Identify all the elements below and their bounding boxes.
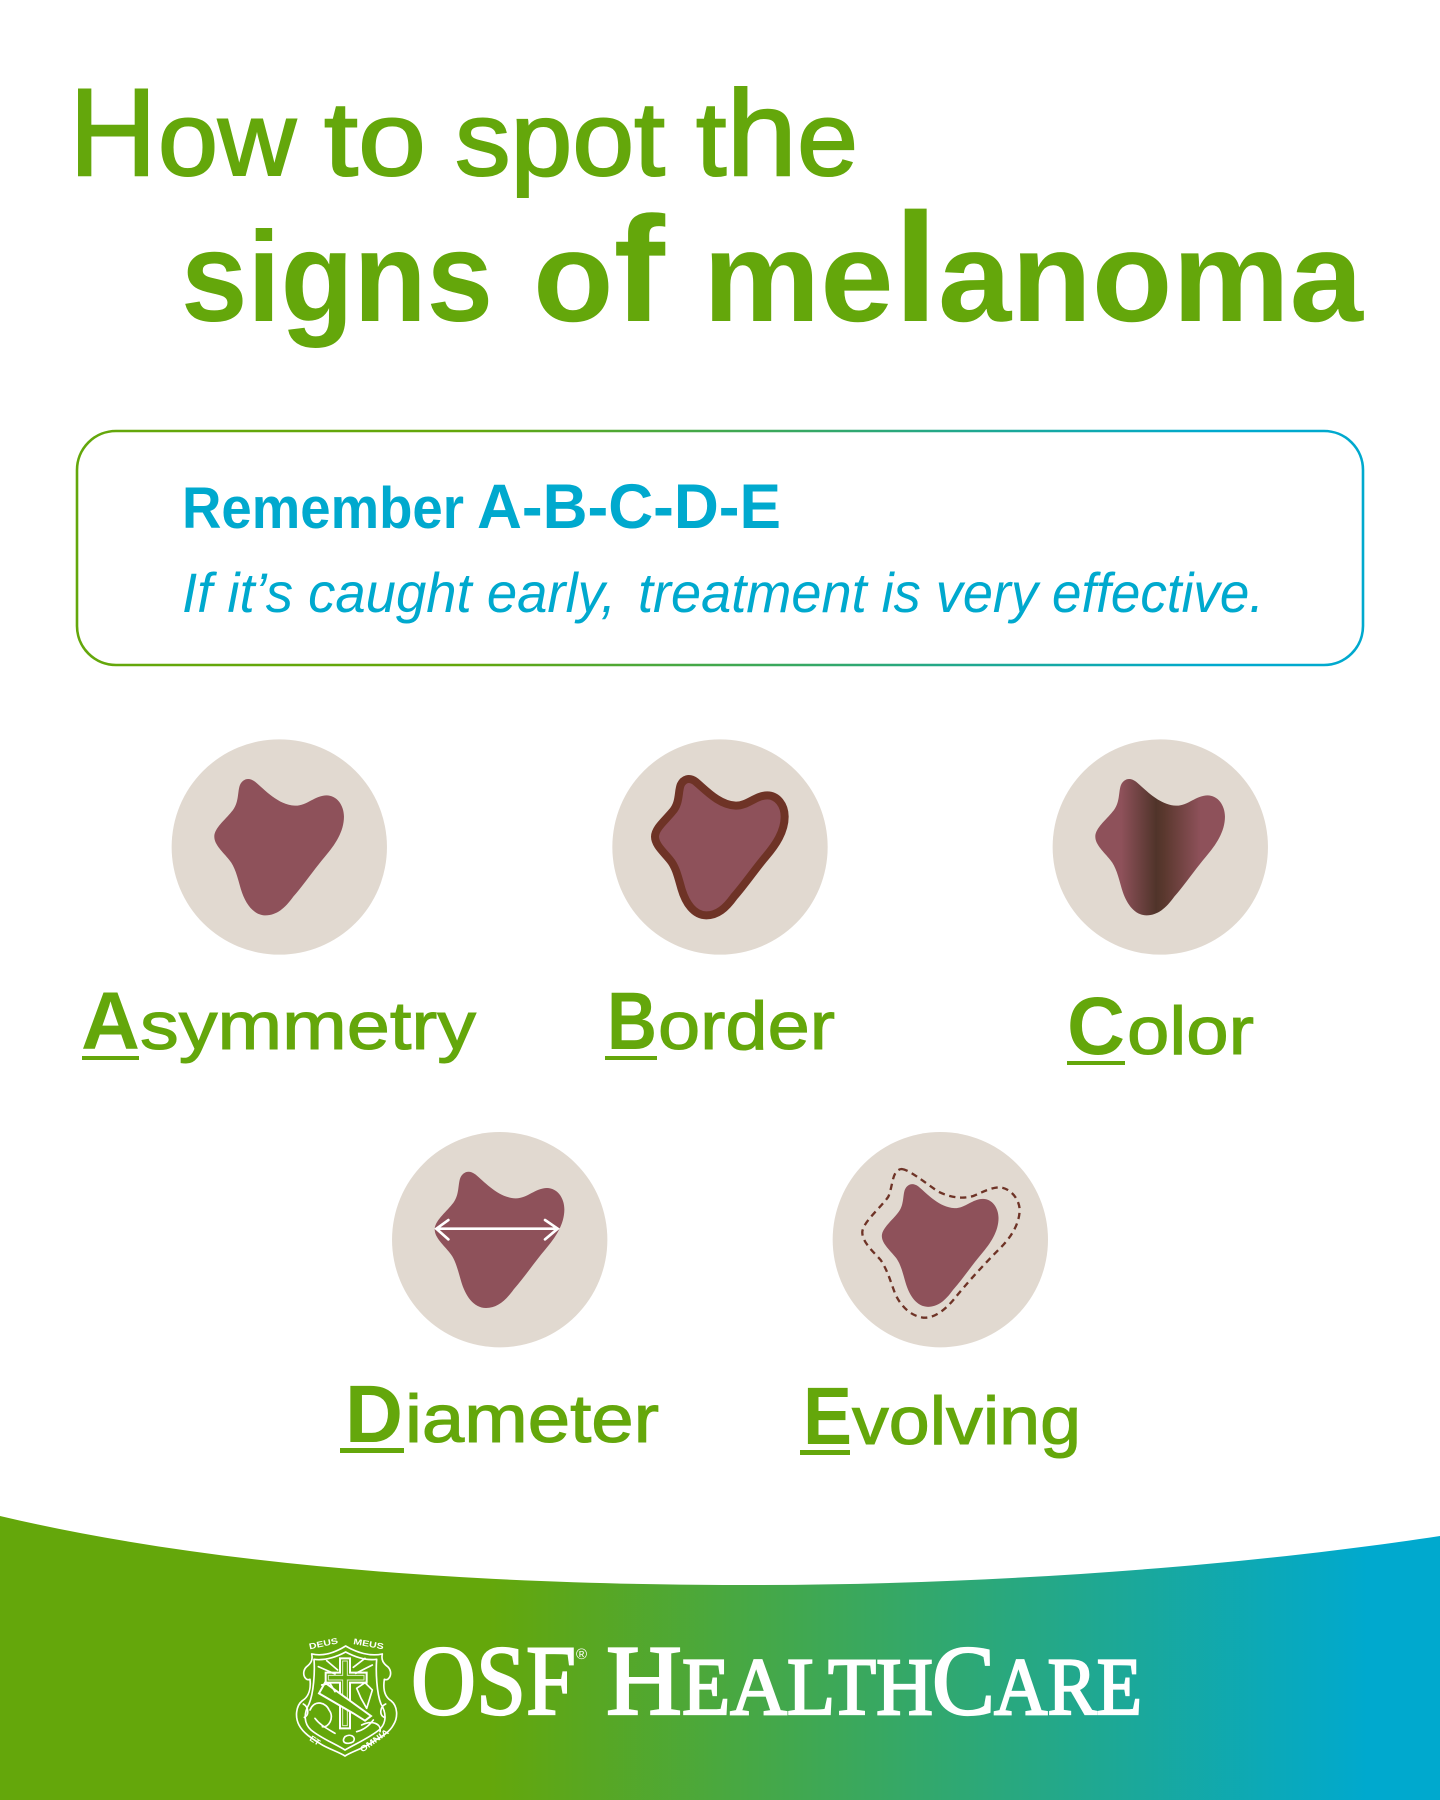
label: border <box>605 976 835 1067</box>
title line 1: the <box>696 65 858 201</box>
item: asymmetry <box>81 739 476 1067</box>
title line 1: H <box>69 64 157 202</box>
hands and rays <box>303 1658 386 1743</box>
label: asymmetry <box>81 976 476 1067</box>
label: border: B <box>607 976 657 1067</box>
icon: diameter <box>392 1132 607 1347</box>
crest motto: OMNIA <box>358 1727 390 1754</box>
title line 1: to <box>324 81 426 198</box>
wordmark: ® <box>576 1646 587 1663</box>
item: evolving <box>800 1132 1081 1462</box>
wordmark: C <box>932 1625 995 1736</box>
title line 2: of <box>533 185 666 353</box>
label: diameter: D <box>345 1369 403 1460</box>
label: asymmetry: symmetry <box>140 988 476 1064</box>
crest motto: DEUS <box>308 1635 339 1651</box>
icon: asymmetry <box>172 739 387 955</box>
panel outline <box>77 431 1363 665</box>
panel text: effective. <box>1052 561 1264 624</box>
panel heading: Remember <box>182 476 464 541</box>
wordmark: EALTH <box>682 1641 933 1732</box>
item: border <box>605 739 835 1067</box>
panel heading <box>182 472 781 542</box>
crest motto: ET <box>308 1733 322 1747</box>
label: color <box>1067 981 1254 1072</box>
title line 2: melanoma <box>703 181 1364 354</box>
label: evolving <box>800 1371 1081 1462</box>
title line 2 <box>181 181 1364 354</box>
label: color: C <box>1067 981 1125 1072</box>
wordmark: ARE <box>994 1641 1142 1732</box>
wordmark: H <box>606 1625 682 1736</box>
panel text: treatment is very <box>638 561 1041 624</box>
label: diameter: iameter <box>405 1381 659 1457</box>
band <box>319 1683 371 1721</box>
panel text: If it’s caught early, <box>182 561 616 624</box>
wordmark: OSF <box>411 1625 576 1736</box>
title <box>69 64 1364 354</box>
crest <box>297 1635 397 1756</box>
crest motto: MEUS <box>353 1636 385 1651</box>
icon: evolving <box>833 1132 1048 1347</box>
title line 2: signs <box>181 206 493 349</box>
item: color <box>1053 739 1268 1072</box>
label: color: olor <box>1127 993 1254 1069</box>
cross <box>326 1658 367 1728</box>
crest motto <box>308 1635 390 1754</box>
label: border: order <box>658 988 835 1064</box>
wordmark <box>411 1625 1142 1736</box>
icon: border <box>612 739 828 955</box>
title line 1 <box>69 64 858 202</box>
panel heading: A-B-C-D-E <box>477 472 781 542</box>
title line 1: spot <box>455 81 665 198</box>
logo: OSF HealthCare <box>297 1625 1142 1756</box>
title line 1: ow <box>158 81 297 198</box>
icon: color <box>1053 739 1268 955</box>
label: diameter <box>340 1369 659 1460</box>
label: asymmetry: A <box>81 976 140 1067</box>
label: evolving: E <box>803 1371 852 1462</box>
label: evolving: volving <box>852 1383 1081 1459</box>
dashed evolving outline <box>862 1169 1020 1318</box>
item: diameter <box>340 1132 659 1460</box>
footer band <box>0 1516 1440 1800</box>
arrow: diameter measure <box>436 1220 558 1239</box>
panel: remember ABCDE <box>77 431 1363 665</box>
panel text <box>182 561 1264 624</box>
